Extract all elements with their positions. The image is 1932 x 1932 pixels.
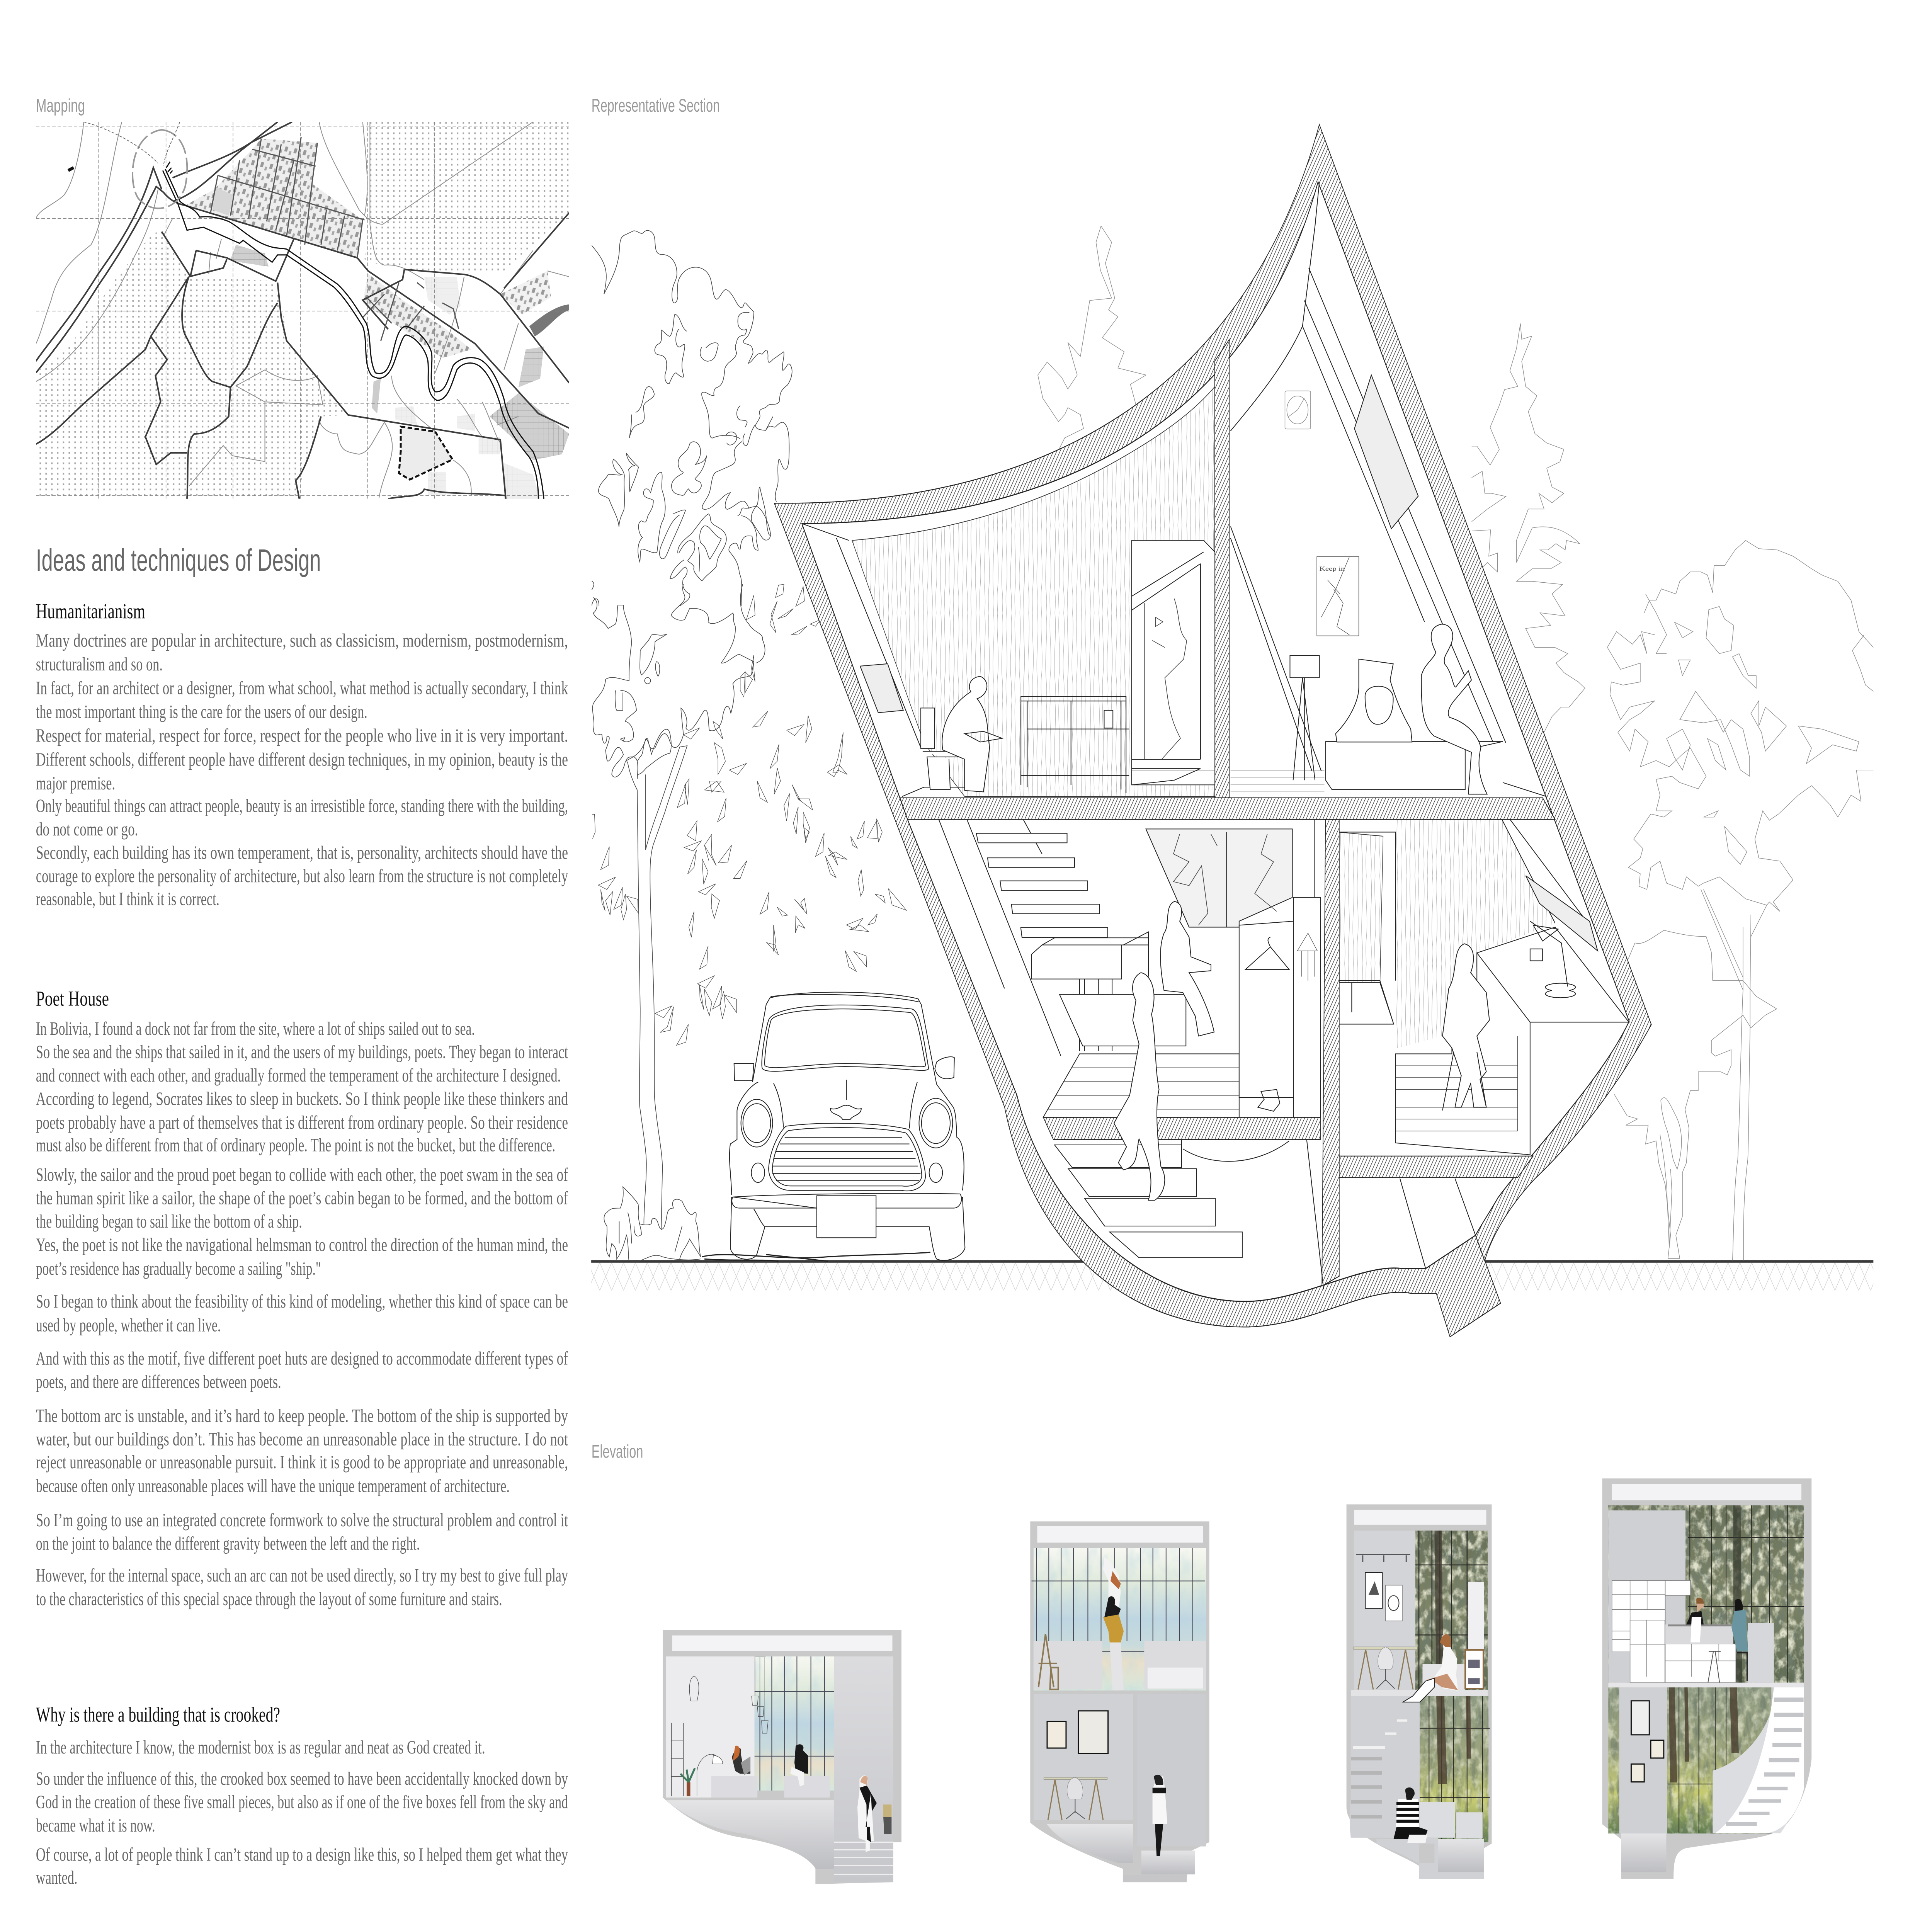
elevation 4: outer shell xyxy=(1602,1478,1811,1879)
poster xyxy=(1317,557,1359,636)
text block: Poet House xyxy=(36,987,568,1610)
lower floor fittings xyxy=(939,820,1629,1289)
shelf xyxy=(1021,696,1129,793)
text block: Poet House: poet’s residence has gradually become a sailing "ship." xyxy=(36,1258,321,1279)
hallway table xyxy=(1339,981,1394,1024)
elevation 4: chef xyxy=(1686,1598,1704,1643)
elevation 4: upper forest window xyxy=(1608,1505,1804,1683)
hanger xyxy=(1245,937,1289,969)
elevation 1: shelf, lamp and plant xyxy=(672,1676,723,1796)
elevation 4: stairs xyxy=(1621,1833,1666,1872)
elevation 1: sofas xyxy=(711,1776,830,1798)
elevation 4: kitchen units xyxy=(1630,1620,1736,1683)
text block: Poet House: water, but our buildings don’t. This has become an unreasonable place in the structure. I do not xyxy=(36,1429,568,1450)
text block: Poet House: And with this as the motif, five different poet huts are designed to accommodate different types of xyxy=(36,1348,568,1369)
heading: Representative Section: Representative Section xyxy=(592,95,720,116)
text block: Poet House: on the joint to balance the different gravity between the left and the right. xyxy=(36,1533,420,1554)
text block: Humanitarianism: do not come or go. xyxy=(36,819,138,840)
lower room: wood door xyxy=(1339,832,1383,983)
text block: Poet House: So the sea and the ships that sailed in it, and the users of my buildings, poets. They began to interact xyxy=(36,1042,568,1063)
left tree lower crown xyxy=(593,584,765,777)
text block: Poet House: Yes, the poet is not like the navigational helmsman to control the direction of the human mind, the xyxy=(36,1235,568,1255)
lower right skylight xyxy=(1526,876,1598,951)
elevation 4: counter stool xyxy=(1708,1651,1721,1683)
elevation 3: lower forest window xyxy=(1420,1696,1490,1842)
tree: large left tree crown xyxy=(592,231,792,606)
map: grid lines xyxy=(36,122,569,499)
right tree crown xyxy=(1607,541,1873,912)
elevation 2: lower walls xyxy=(1034,1694,1206,1882)
text block: Humanitarianism: reasonable, but I think it is correct. xyxy=(36,889,219,910)
text block: Poet House: reject unreasonable or unreasonable pursuit. I think it is good to be appropriate and unreasonable, xyxy=(36,1452,568,1473)
shrub at tree base xyxy=(604,1187,701,1261)
floating stair treads xyxy=(976,833,1108,937)
desk xyxy=(1396,927,1629,1155)
map: dotted land areas xyxy=(36,122,569,499)
left skylight xyxy=(860,664,903,713)
elevation 2: framed pictures xyxy=(1047,1711,1108,1753)
upper room: wood panelling xyxy=(852,387,1215,796)
elevation 1: skylight strip xyxy=(672,1635,893,1651)
elevation 2: skylight strip xyxy=(1037,1526,1203,1543)
text block: Why is there a building that is crooked? xyxy=(36,1703,568,1888)
upper partition wall xyxy=(1215,340,1229,798)
map: thin paths xyxy=(36,122,569,498)
stair storage box xyxy=(1031,932,1148,979)
standing figure xyxy=(1114,973,1165,1200)
text block: Poet House: poets probably have a part of themselves that is different from ordinary people. So their residence xyxy=(36,1112,568,1133)
text block: Poet House: to the characteristics of this special space through the layout of some furniture and stairs. xyxy=(36,1588,502,1610)
text block: Poet House: poets, and there are differences between poets. xyxy=(36,1371,281,1392)
elevation 4: lower wall with pictures xyxy=(1619,1687,1667,1833)
tree: right deciduous tree xyxy=(1607,541,1873,1260)
text block: Humanitarianism: Secondly, each building has its own temperament, that is, personality, architects should have the xyxy=(36,842,568,863)
desk lamp and plant xyxy=(1530,921,1575,998)
text block: Humanitarianism: Respect for material, respect for force, respect for the people who live in it is very important. xyxy=(36,725,568,746)
text block: Poet House: According to legend, Socrates likes to sleep in buckets. So I think people like these thinkers and xyxy=(36,1088,568,1109)
elevation 2 xyxy=(1030,1521,1209,1882)
text block: Poet House: So I’m going to use an integrated concrete formwork to solve the structural problem and control it xyxy=(36,1510,568,1531)
figure reading from behind xyxy=(1336,659,1412,742)
figure sitting with a book xyxy=(1422,624,1487,794)
elevation 1: people xyxy=(732,1744,891,1852)
text block: Poet House: because often only unreasonable places will have the unique temperament of architecture. xyxy=(36,1476,510,1497)
elevation 2: easel xyxy=(1039,1634,1058,1689)
text block: Poet House: the building began to sail like the bottom of a ship. xyxy=(36,1211,302,1232)
text block: Why is there a building that is crooked?: So under the influence of this, the crooked box seemed to have been accidentally knocked down by xyxy=(36,1768,568,1789)
right tree trunks xyxy=(1614,889,1777,1260)
elevation 3: upper wall xyxy=(1354,1531,1415,1690)
elevation 1: interior walls xyxy=(666,1656,893,1882)
text block: Humanitarianism: Humanitarianism xyxy=(36,600,145,623)
text block: Poet House: However, for the internal space, such an arc can not be used directly, so I try my best to give full play xyxy=(36,1565,568,1586)
text block: Humanitarianism: Only beautiful things can attract people, beauty is an irresistible force, standing there with the building, xyxy=(36,796,568,816)
elevation 1: outer shell xyxy=(663,1630,901,1884)
elevation 3: low blocks xyxy=(1420,1802,1483,1838)
upper floor slab xyxy=(900,798,1555,820)
car xyxy=(702,992,965,1261)
text block: Why is there a building that is crooked?: God in the creation of these five small pieces, but also as if one of the five boxes fell from the sky and xyxy=(36,1792,568,1813)
elevation 1: landscape window xyxy=(755,1656,834,1791)
text block: Poet House: the human spirit like a sailor, the shape of the poet’s cabin began to be formed, and the bottom of xyxy=(36,1188,568,1209)
stair-wall lines xyxy=(939,820,1587,1289)
elevation 3: stairwell wall xyxy=(1350,1696,1484,1879)
reading figure on toilet xyxy=(942,676,1002,792)
elevation 3: outer shell xyxy=(1347,1504,1492,1879)
text block: Why is there a building that is crooked?: Of course, a lot of people think I can’t stand up to a design like this, so I helped them get what they xyxy=(36,1844,568,1865)
heading: Mapping: Mapping xyxy=(36,95,85,116)
elevation 4: customer xyxy=(1731,1599,1748,1681)
text block: Poet House: Poet House xyxy=(36,987,109,1010)
text block: Why is there a building that is crooked?: wanted. xyxy=(36,1867,77,1888)
elevation 1: pendant lights xyxy=(752,1657,768,1733)
lower stairs xyxy=(1054,1145,1242,1258)
heading: Ideas and techniques of Design: Ideas and techniques of Design xyxy=(36,543,321,577)
text block: Humanitarianism: structuralism and so on. xyxy=(36,654,163,675)
elevation 4: skylight strip xyxy=(1612,1484,1801,1500)
text block: Poet House: must also be different from that of ordinary people. The point is not the bucket, but the difference. xyxy=(36,1135,555,1156)
elevation 4: floor xyxy=(1608,1683,1804,1687)
elevation 3: floor xyxy=(1351,1690,1488,1696)
windblown leaves xyxy=(592,584,906,1045)
floor lamp xyxy=(1290,655,1320,780)
tree: fir to the right of the roof xyxy=(1472,323,1585,732)
map: main roads xyxy=(36,122,569,499)
text block: Why is there a building that is crooked?: Why is there a building that is crooked? xyxy=(36,1703,280,1726)
clock xyxy=(1285,391,1311,429)
floor planks xyxy=(1043,1054,1239,1117)
seated woman xyxy=(1442,944,1490,1107)
elevation 3: seated man with laptop xyxy=(1393,1787,1428,1843)
elevation 3: desk and chair xyxy=(1354,1647,1417,1650)
building section: shell walls xyxy=(774,124,1651,1337)
text block: Poet House: So I began to think about the feasibility of this kind of modeling, whether this kind of space can be xyxy=(36,1291,568,1312)
elevation 1 xyxy=(663,1630,901,1884)
text block: Humanitarianism: In fact, for an architect or a designer, from what school, what method is actually secondary, I think xyxy=(36,678,568,699)
lower partition wall xyxy=(1322,820,1339,1286)
building section: interior void xyxy=(802,182,1629,1301)
text block: Why is there a building that is crooked?: became what it is now. xyxy=(36,1815,155,1836)
tree: fir behind the roof xyxy=(1038,226,1146,456)
bench seat xyxy=(1060,995,1186,1046)
large window xyxy=(1132,540,1215,785)
right skylight xyxy=(1354,375,1418,529)
text block: Poet House: In Bolivia, I found a dock not far from the site, where a lot of ships sailed out to sea. xyxy=(36,1018,475,1039)
text block: Humanitarianism: Different schools, different people have different design techniques, in my opinion, beauty is the xyxy=(36,749,568,770)
heading: Elevation: Elevation xyxy=(592,1441,643,1462)
elevation 4 xyxy=(1602,1478,1811,1879)
sitting figure xyxy=(1160,901,1214,1036)
text block: Humanitarianism: the most important thing is the care for the users of our design. xyxy=(36,701,367,722)
lower room: wood panelling xyxy=(1396,820,1555,1049)
elevation 2: upper walls xyxy=(1034,1641,1206,1689)
map: town street grid xyxy=(211,137,459,341)
elevation 4: kitchen shelves xyxy=(1612,1580,1690,1652)
dining chair xyxy=(1442,1052,1486,1111)
poster: Keep in xyxy=(1320,565,1345,572)
elevation 4: upper wall panel xyxy=(1608,1510,1685,1683)
lower left window xyxy=(1146,829,1293,927)
map: river xyxy=(163,169,544,499)
elevation 2: outer shell xyxy=(1030,1521,1209,1882)
toilet xyxy=(921,708,963,789)
elevation 3: skylight strip xyxy=(1354,1510,1486,1525)
upper floor fittings xyxy=(802,182,1546,796)
elevation 3: woman with dog and side table xyxy=(1403,1634,1483,1702)
ceiling reveal lines xyxy=(802,182,1546,796)
small pet figure xyxy=(1258,1090,1280,1111)
text block: Poet House: The bottom arc is unstable, and it’s hard to keep people. The bottom of the ship is supported by xyxy=(36,1405,568,1426)
map: proposed site xyxy=(399,427,452,480)
room floor planks xyxy=(1132,771,1325,792)
elevation 3: upper forest window xyxy=(1415,1531,1488,1690)
map: town blocks xyxy=(185,138,569,499)
text block: Humanitarianism xyxy=(36,600,568,910)
wardrobe xyxy=(1239,921,1294,1097)
elevation 2: people xyxy=(1103,1557,1167,1856)
text block: Poet House: used by people, whether it can live. xyxy=(36,1315,221,1336)
text block: Why is there a building that is crooked?: In the architecture I know, the modernist box is as regular and neat as God created it. xyxy=(36,1737,485,1758)
map: dock circle marker xyxy=(68,122,187,208)
elevation 4: curved stair wall xyxy=(1713,1687,1804,1833)
site map xyxy=(36,122,569,499)
column with dreamcatcher xyxy=(1294,898,1320,1117)
elevation 3 xyxy=(1347,1504,1492,1879)
ground strip xyxy=(591,1260,1873,1291)
bench xyxy=(1326,742,1503,789)
elevation 3: stairs xyxy=(1438,1839,1484,1872)
elevation 2: desk and chair xyxy=(1044,1777,1107,1780)
elevation 3: wall art xyxy=(1356,1554,1410,1621)
elevation 4: lower forest window xyxy=(1608,1687,1771,1833)
elevation 2: landscape window xyxy=(1031,1548,1206,1690)
text block: Humanitarianism: courage to explore the personality of architecture, but also learn from the structure is not completely xyxy=(36,866,568,887)
tree: left trunk, branches and leaves xyxy=(592,584,965,1261)
text block: Humanitarianism: Many doctrines are popular in architecture, such as classicism, modernism, postmodernism, xyxy=(36,630,568,651)
text block: Humanitarianism: major premise. xyxy=(36,773,115,794)
text block: Poet House: Slowly, the sailor and the proud poet began to collide with each other, the poet swam in the sea of xyxy=(36,1164,568,1185)
text block: Poet House: and connect with each other, and gradually formed the temperament of the architecture I designed. xyxy=(36,1065,561,1086)
lower left floor slab xyxy=(1043,1117,1320,1139)
lower right floor slab xyxy=(1339,1156,1533,1178)
